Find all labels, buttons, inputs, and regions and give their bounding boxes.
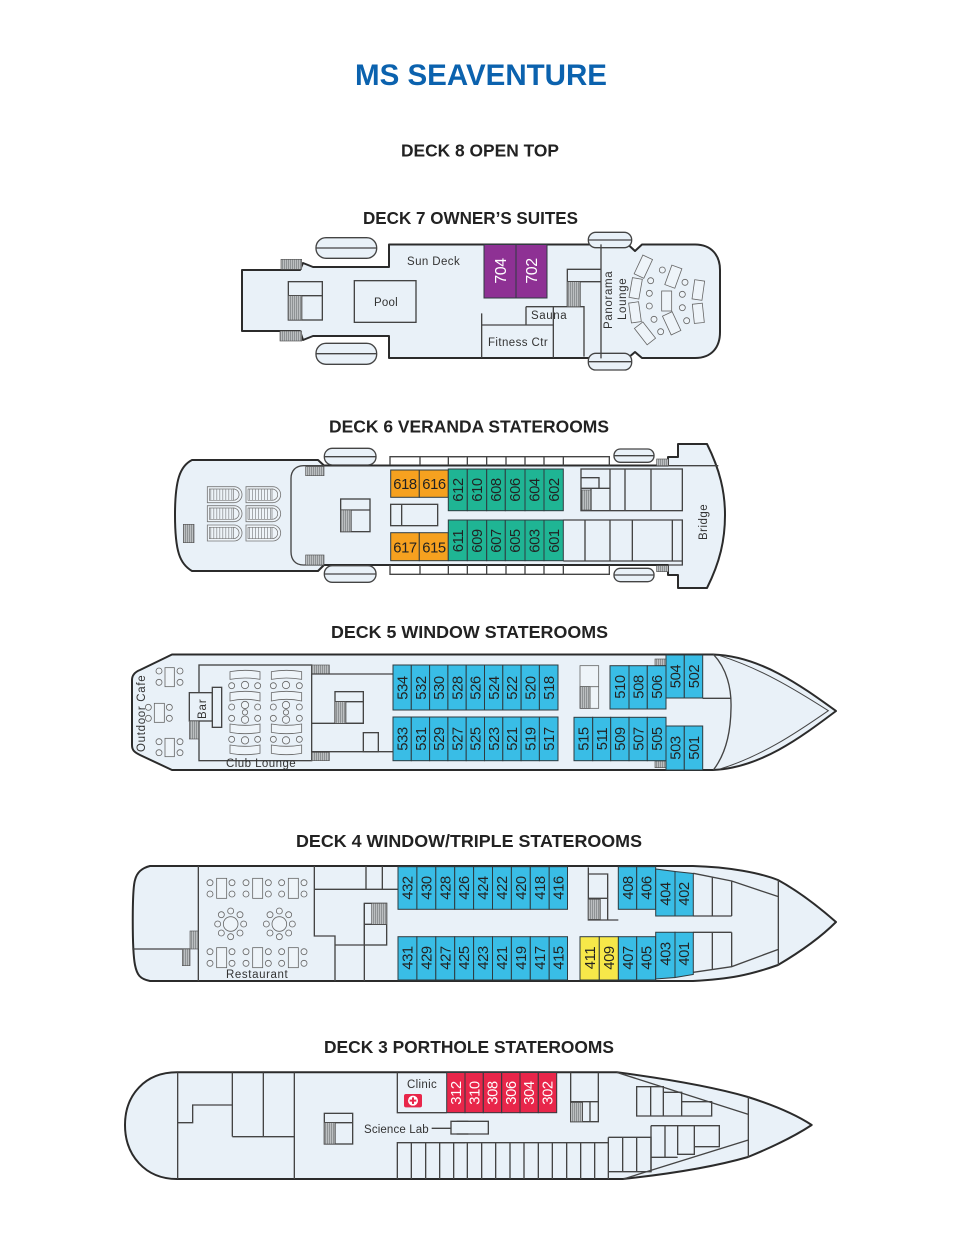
cabins deck 5: 503 (668, 736, 684, 760)
cabins deck 7: 704 (493, 258, 510, 284)
cabins deck 3: 312 (449, 1081, 465, 1105)
cabins deck 6: 611 (451, 530, 467, 552)
cabins deck 5: 527 (450, 727, 466, 751)
cabins deck 3: 302 (540, 1081, 556, 1105)
forward rooms deck 4 (588, 867, 778, 980)
heading: deck 3: DECK 3 PORTHOLE STATEROOMS (324, 1037, 614, 1057)
cabins deck 4: 409 (602, 946, 618, 970)
cabins deck 5: 528 (450, 676, 466, 700)
cabins deck 4: 408 (621, 876, 637, 900)
hull deck 4 (133, 866, 836, 981)
cabins deck 4: 426 (457, 876, 473, 900)
cabins deck 5: 507 (632, 727, 648, 751)
cabins deck 6: 609 (470, 529, 486, 553)
cabins deck 4: 423 (476, 946, 492, 970)
cabins deck 3: 310 (468, 1081, 484, 1105)
cabins deck 4: 419 (514, 946, 530, 970)
labels deck 5 (136, 675, 296, 770)
title: MS SEAVENTURE (355, 59, 607, 92)
cabins deck 4: 420 (514, 876, 530, 900)
labels deck 7: Lounge (617, 278, 629, 320)
cabins deck 3 (447, 1072, 557, 1113)
cabins deck 5: 509 (613, 727, 629, 751)
labels deck 7: Sauna (531, 310, 567, 322)
cabins deck 6: 617 (393, 540, 417, 556)
forward rooms deck 3 (440, 1072, 748, 1179)
labels deck 7 (374, 256, 629, 349)
labels deck 7: Panorama (603, 271, 615, 329)
cabins deck 4: 401 (677, 942, 693, 966)
cabins deck 6: 618 (393, 477, 417, 493)
panel: deck 4 plan (132, 866, 836, 981)
cabins deck 6: 605 (508, 529, 524, 553)
cabins deck 6: 601 (547, 529, 563, 553)
labels deck 3 (364, 1079, 437, 1136)
cabins deck 5: 515 (576, 727, 592, 751)
cabins deck 7 (484, 244, 547, 298)
labels deck 5: Outdoor Cafe (136, 675, 148, 752)
cabins deck 6: 606 (508, 478, 524, 502)
labels deck 3: Clinic (407, 1079, 437, 1091)
sun deck rail and chairs (183, 448, 465, 582)
cabins deck 5: 534 (396, 676, 412, 700)
hull deck 7 (242, 244, 720, 358)
aft rooms deck 3 (178, 1072, 468, 1179)
cabins deck 6: 603 (528, 529, 544, 553)
cabins deck 4 (398, 867, 693, 980)
cabins deck 5: 505 (650, 727, 666, 751)
cabins deck 5: 521 (505, 727, 521, 751)
cabins deck 6: 612 (451, 478, 467, 502)
cabins deck 6 (391, 469, 563, 561)
cabins deck 4: 416 (552, 876, 568, 900)
labels deck 3: Science Lab (364, 1124, 429, 1136)
cabins deck 5 (393, 655, 703, 770)
cabins deck 5: 525 (468, 727, 484, 751)
cabins deck 4: 429 (420, 946, 436, 970)
cabins deck 4: 406 (640, 876, 656, 900)
cabins deck 6: 616 (422, 477, 446, 493)
cabins deck 4: 418 (533, 876, 549, 900)
cabins deck 4: 428 (438, 876, 454, 900)
cabins deck 4: 407 (621, 946, 637, 970)
cabins deck 4: 411 (583, 947, 599, 969)
cabins deck 4: 422 (495, 876, 511, 900)
heading: deck 6: DECK 6 VERANDA STATEROOMS (329, 416, 609, 436)
heading: deck 8: DECK 8 OPEN TOP (401, 140, 559, 160)
cabins deck 5: 510 (613, 675, 629, 699)
cabins deck 5: 519 (524, 727, 540, 751)
cabins deck 6: 607 (489, 529, 505, 553)
cabins deck 4: 417 (533, 946, 549, 970)
heading: deck 7: DECK 7 OWNER’S SUITES (363, 208, 578, 228)
cabins deck 4: 421 (495, 946, 511, 970)
cabins deck 5: 518 (542, 676, 558, 700)
labels deck 7: Sun Deck (407, 256, 460, 268)
hull deck 6 (175, 444, 725, 588)
cabins deck 4: 425 (457, 946, 473, 970)
cabins deck 4: 431 (400, 946, 416, 970)
cabins deck 4: 403 (658, 942, 674, 966)
cabins deck 5: 511 (595, 728, 611, 750)
bow lines deck 5 (580, 654, 828, 770)
hull deck 5 (132, 654, 836, 770)
club lounge deck 5 (145, 665, 393, 761)
cabins deck 5: 530 (432, 676, 448, 700)
forward rooms deck 6 (450, 449, 718, 582)
cabins deck 5: 501 (687, 736, 703, 760)
cabins deck 5: 522 (505, 676, 521, 700)
cabins deck 6: 615 (422, 540, 446, 556)
labels deck 5: Bar (197, 699, 209, 719)
cabins deck 5: 508 (632, 675, 648, 699)
lifeboats deck 7 (316, 238, 377, 364)
icon: medical cross (404, 1094, 422, 1107)
cabins deck 4: 432 (400, 876, 416, 900)
interior deck 7 (280, 232, 705, 370)
cabins deck 5: 506 (650, 675, 666, 699)
cabins deck 4: 404 (658, 882, 674, 906)
cabins deck 5: 502 (687, 665, 703, 688)
heading: deck 4: DECK 4 WINDOW/TRIPLE STATEROOMS (296, 831, 642, 851)
cabins deck 3: 306 (504, 1081, 520, 1105)
panel: deck 5 plan (132, 654, 836, 770)
cabins deck 4: 427 (438, 946, 454, 970)
heading: deck 5: DECK 5 WINDOW STATEROOMS (331, 622, 608, 642)
cabins deck 5: 526 (468, 676, 484, 700)
cabins deck 5: 524 (487, 676, 503, 700)
cabins deck 4: 424 (476, 876, 492, 900)
panel: deck 6 plan (175, 444, 725, 588)
cabins deck 6: 610 (470, 478, 486, 502)
panel: deck 3 plan (125, 1072, 812, 1179)
cabins deck 4: 415 (552, 946, 568, 970)
cabins deck 4: 402 (677, 882, 693, 906)
label: restaurant: Restaurant (226, 969, 288, 981)
cabins deck 4: 430 (420, 876, 436, 900)
cabins deck 5: 529 (432, 727, 448, 751)
labels deck 7: Fitness Ctr (488, 337, 548, 349)
cabins deck 6: 604 (528, 478, 544, 502)
labels deck 5: Club Lounge (226, 758, 296, 770)
labels deck 7: Pool (374, 297, 398, 309)
cabins deck 5: 523 (487, 727, 503, 751)
cabins deck 5: 531 (414, 727, 430, 751)
cabins deck 6: 608 (489, 478, 505, 502)
cabins deck 5: 532 (414, 676, 430, 700)
cabins deck 5: 504 (668, 665, 684, 688)
cabins deck 5: 533 (396, 727, 412, 751)
restaurant deck 4 (132, 866, 398, 981)
cabins deck 4: 405 (640, 946, 656, 970)
cabins deck 3: 308 (486, 1081, 502, 1105)
panel: deck 7 plan (242, 232, 720, 370)
cabins deck 5: 520 (524, 676, 540, 700)
cabins deck 3: 304 (522, 1081, 538, 1105)
label: bridge: Bridge (698, 504, 710, 540)
hull deck 3 (125, 1072, 812, 1179)
cabins deck 7: 702 (524, 258, 541, 284)
cabins deck 5: 517 (542, 727, 558, 751)
cabins deck 6: 602 (547, 478, 563, 502)
